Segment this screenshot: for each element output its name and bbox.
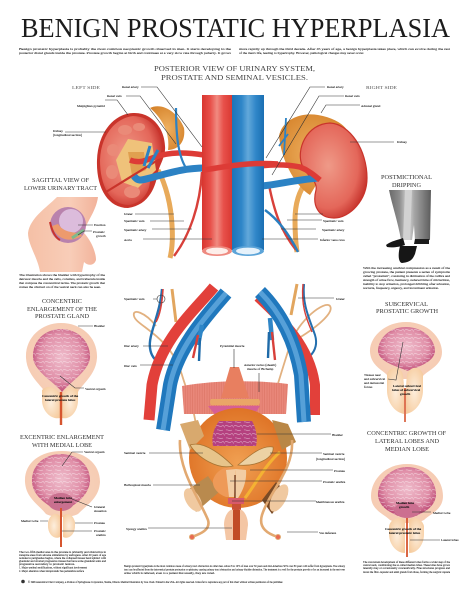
- heading: concentric growth: [367, 430, 447, 453]
- intro text: Benign prostatic hyperplasia is probably the most common neoplastic growth observed in men. It starts developing in the: [19, 47, 232, 51]
- left seminal vesicle: [190, 444, 233, 467]
- heading: excentric enlargement: WITH MEDIAL LOBE: [32, 442, 92, 449]
- left adrenal gland: [150, 106, 184, 150]
- text: postmictional caption: growing prostate, the patient presents a series of symptoms: [363, 270, 451, 275]
- labels: urinary system: Spermatic vein: [124, 219, 145, 223]
- labels: pelvic anatomy: (longitudinal section): [316, 457, 345, 461]
- panel: subcervical diagram: [370, 322, 442, 422]
- labels: pelvic anatomy: Anterior rectus (sheath): [244, 363, 276, 367]
- labels: pelvic anatomy: Membranous urethra: [316, 500, 345, 504]
- right renal artery crossing: [204, 163, 278, 170]
- labels: concentric growth: lateral prostatic lobes: [389, 531, 421, 535]
- labels: sagittal: growth: [96, 234, 106, 238]
- heading: subcervical growth: [376, 301, 439, 315]
- heading: sagittal view: LOWER URINARY TRACT: [24, 185, 97, 192]
- right lower vas deferens: [261, 440, 292, 540]
- labels: pelvic anatomy: Bladder: [332, 433, 344, 437]
- labels: concentric growth: Median lobe: [396, 501, 414, 505]
- labels: excentric enlargement: Ureteral: [94, 505, 105, 509]
- side label: left side: LEFT SIDE: [72, 85, 100, 90]
- labels: pelvic anatomy: Prostate: [334, 469, 345, 473]
- labels: urinary system: Spermatic artery: [322, 228, 345, 232]
- right kidney: [300, 123, 367, 218]
- text: sagittal caption: detrusor muscle and the cells, columns, and trabecula inside: [19, 277, 106, 282]
- labels: concentric enlargement: lateral prostate lobes: [45, 398, 76, 402]
- labels: pelvic anatomy: Prostatic urethra: [323, 480, 346, 484]
- labels: excentric enlargement: Medial Lobe: [21, 519, 39, 523]
- orange prostate capsule: [189, 408, 287, 508]
- labels: urinary system: Spermatic vein: [323, 219, 344, 223]
- text: central caption: tract can be affected from the intravesical prostate protrusion or sphincter, causing urinary tract obstruction and urinary bladder distention. The treatment is a well for the prostate growth or for an increased in the rest-over: [124, 568, 346, 572]
- text: postmictional caption: inability to stop urination, prolonged dribbling after urination,: [363, 282, 450, 287]
- labels: sagittal: Prostatic: [93, 230, 105, 234]
- heading: posterior view: PROSTATE AND SEMINAL VESICLES.: [161, 73, 308, 82]
- labels: urinary system: Inferior vena cava: [320, 238, 345, 242]
- cross section: [50, 207, 86, 243]
- text: concentric growth caption: [363, 560, 450, 575]
- membranous urethra: [228, 498, 244, 512]
- panel: posterior urinary system: [97, 95, 367, 258]
- labels: urinary system: Kidney: [53, 129, 63, 133]
- muscle band: [182, 381, 288, 414]
- left ureter: [158, 170, 172, 258]
- labels: sagittal: Erection: [94, 223, 106, 227]
- labels: urinary system: (longitudinal section): [53, 133, 82, 137]
- text: excentric caption: nodules in periglandes begins, where the collapsed tissues bend sphinct with: [19, 556, 106, 561]
- labels: excentric enlargement: Prostatic: [94, 529, 106, 533]
- labels: concentric enlargement: Concentric growth of the: [42, 394, 79, 398]
- icon: left shoe: [386, 238, 405, 247]
- labels: pelvic anatomy: Seminal vesicle: [124, 451, 146, 455]
- prostate right strip: [245, 452, 280, 498]
- bladder: [212, 421, 257, 446]
- heading: sagittal view: SAGITTAL VIEW OF: [32, 177, 90, 184]
- labels: urinary system: [53, 85, 407, 242]
- right spermatic vessels: [303, 284, 316, 356]
- heading: concentric enlargement: [27, 298, 97, 320]
- left iliac vein: [163, 293, 226, 430]
- intro text: of the man's life, leading to hypertrophy. However, pathological changes may never occur.: [239, 51, 364, 56]
- labels: subcervical: Lateral subcervical: [393, 384, 421, 388]
- title: BENIGN PROSTATIC HYPERPLASIA: [21, 13, 450, 43]
- labels: urinary system: Malpighian pyramid: [77, 104, 105, 108]
- heading: subcervical growth: SUBCERVICAL: [385, 301, 428, 308]
- text: postmictional caption: called "prostatism", consisting in diminution of the calibre and: [363, 274, 450, 279]
- labels: urinary system: Spermatic artery: [124, 228, 147, 232]
- labels: urinary system: Aorta: [124, 238, 132, 242]
- text: postmictional caption: strength of urine flow, hesitancy, reduced time of micturition,: [363, 278, 450, 283]
- left renal artery and vein: [130, 146, 206, 180]
- labels: pelvic anatomy: muscle of Bichamp: [247, 367, 274, 371]
- text: sagittal caption: comes the obstruct on of the vesical neck can also be seen.: [19, 285, 101, 289]
- labels: excentric enlargement: urethra: [96, 533, 106, 537]
- labels: subcervical: lobes of subcervical: [392, 388, 420, 392]
- prostate lobes: [213, 468, 236, 497]
- labels: excentric enlargement: [21, 450, 107, 537]
- right ureter: [295, 181, 307, 252]
- text: concentric growth caption: vesical neck, conditioning the so-called median lobes. These lobes have grown: [363, 563, 450, 568]
- left kidney: [97, 113, 165, 208]
- copyright: © 1996 Anatomical Chart Company, a division of Springhouse Corporation, Skokie, Illinois. Medical Illustration by Lisa Clark. Printed in the USA. All rights reserved. Unlawful to reproduce any part of this chart without written permission of the publisher.: [28, 579, 283, 585]
- text: concentric growth caption: laterally may or occasionally concentrically. Fine structures progress and: [363, 566, 450, 570]
- heading: concentric growth: LATERAL LOBES AND: [375, 438, 440, 445]
- text: concentric growth caption: The concurrent development of these different lobes forms a wider step of the: [363, 560, 450, 564]
- text: excentric caption: [19, 550, 106, 573]
- text: postmictional caption: With the increasing urethral compression as a result of the: [363, 266, 451, 270]
- heading: postmictional dripping: [381, 174, 432, 189]
- heading: postmictional dripping: DRIPPING: [392, 182, 422, 189]
- heading: concentric growth: CONCENTRIC GROWTH OF: [367, 430, 447, 437]
- labels: urinary system: Renal artery: [122, 85, 139, 89]
- icon: back shoe: [414, 239, 429, 244]
- labels: pelvic anatomy: Spermatic vein: [124, 297, 145, 301]
- text: sagittal caption: The illustration shows the bladder with hypertrophy of the: [19, 273, 106, 277]
- left lower vas deferens: [180, 440, 209, 540]
- intro text: posterior distal glands inside the prostate. Prostate growth begins at birth and continues at a very slow rate through puberty. It grows: [19, 51, 232, 55]
- left ureter: [172, 289, 176, 322]
- labels: subcervical: and detrusorial: [364, 381, 384, 385]
- labels: concentric enlargement: Bladder: [94, 324, 106, 328]
- labels: excentric enlargement: Prostate: [94, 521, 105, 525]
- penile bulb: [224, 510, 248, 540]
- labels: urinary system: Kidney: [397, 140, 407, 144]
- labels: urinary system: Ureter: [124, 212, 134, 216]
- labels: subcervical: Tissues near: [364, 373, 382, 377]
- right iliac wing: [272, 420, 296, 450]
- right seminal vesicle: [238, 447, 273, 465]
- left iliac artery: [149, 287, 214, 420]
- right iliac vein: [260, 292, 304, 422]
- text: postmictional caption: nocturia, frequency, urgency, and incontinent urination.: [363, 286, 439, 291]
- heading: posterior view: POSTERIOR VIEW OF URINARY SYSTEM,: [154, 64, 315, 73]
- text: postmictional caption: [363, 266, 451, 291]
- right iliac artery: [258, 297, 315, 415]
- labels: urinary system: Renal vein: [107, 94, 122, 98]
- labels: concentric growth: Medial Lobe: [433, 511, 451, 515]
- labels: concentric growth: growth: [399, 505, 409, 509]
- panel: concentric growth diagram: [371, 464, 443, 557]
- labels: pelvic anatomy: Bulbospinal muscle: [124, 483, 151, 487]
- heading: concentric enlargement: PROSTATE GLAND: [35, 313, 90, 320]
- panel: concentric enlargement diagram: [26, 323, 97, 425]
- heading: posterior view: [154, 64, 315, 82]
- text: excentric caption: 2. Major alteration when intraprostatic has periurethra surface: [19, 569, 84, 573]
- labels: concentric growth: Concentric growth of the: [385, 527, 422, 531]
- icon: right shoe: [399, 246, 417, 263]
- panel: trousers and shoes illustration: [386, 190, 431, 263]
- text: central caption: [124, 564, 346, 576]
- labels: pelvic anatomy: Seminal vesicle: [323, 452, 345, 456]
- text: central caption: urine which is relieved, even to a patient that usually, they are cured.: [124, 571, 215, 576]
- labels: urinary system: Renal vein: [345, 94, 360, 98]
- text: sagittal caption: [19, 273, 106, 289]
- labels: pelvic anatomy: [124, 295, 346, 535]
- left internal iliac branch: [193, 325, 202, 361]
- intro text: [19, 47, 450, 56]
- labels: excentric enlargement: Vesical orgasm: [84, 450, 105, 454]
- heading: subcervical growth: PROSTATIC GROWTH: [376, 308, 439, 315]
- right vas deferens loop: [270, 305, 331, 410]
- left corpus cavernosum: [180, 476, 219, 515]
- heading: concentric enlargement: CONCENTRIC: [42, 298, 82, 305]
- heading: concentric enlargement: ENLARGEMENT OF THE: [27, 306, 97, 313]
- heading: excentric enlargement: EXCENTRIC ENLARGEMENT: [20, 434, 104, 441]
- labels: excentric enlargement: enlargement: [54, 500, 73, 504]
- text: excentric caption: glandular and stromal progressive tissues that have some glandular units and: [19, 559, 106, 563]
- side label: right side: RIGHT SIDE: [366, 85, 397, 90]
- labels: pelvic anatomy: Iliac vein: [124, 364, 137, 368]
- labels: subcervical: and subcervical: [364, 377, 385, 381]
- labels: subcervical: growth: [400, 392, 410, 396]
- right corpus cavernosum: [262, 481, 292, 515]
- labels: pelvic anatomy: Iliac artery: [124, 344, 139, 348]
- text: excentric caption: The two-fifth medial area in the prostate is primarily and obstructive in: [19, 550, 106, 554]
- labels: subcervical: [364, 342, 421, 396]
- labels: concentric growth: [385, 501, 459, 542]
- right ureter: [291, 284, 297, 315]
- labels: urinary system: Renal artery: [327, 85, 344, 89]
- panel: sagittal view: [28, 197, 98, 272]
- panel: excentric enlargement diagram: [25, 451, 100, 547]
- heading: postmictional dripping: POSTMICTIONAL: [381, 174, 432, 181]
- panel: pelvic anatomy: [134, 284, 331, 540]
- heading: sagittal view: [24, 177, 97, 192]
- labels: sagittal: [78, 223, 106, 238]
- left spermatic vessels: [150, 289, 163, 361]
- heading: concentric growth: MEDIAN LOBE: [385, 446, 429, 453]
- text: excentric caption: transpire areas from adverse stimulation by androgens. After 40 years of age: [19, 553, 106, 557]
- trouser legs: [389, 190, 431, 241]
- text: excentric caption: 1. Major urethral modifications, without significant involvement: [19, 566, 87, 570]
- intro text: more rapidly up through the third decade. After 45 years of age, a benign hyperplasia takes place, which can evolve during the rest: [239, 47, 450, 52]
- pubic plate: [210, 399, 260, 405]
- aorta: [202, 95, 232, 256]
- right renal artery and vein: [236, 118, 320, 186]
- text: sagittal caption: that compose the concentrical lacina. The prostatic growth that: [19, 281, 105, 285]
- labels: urinary system: Adrenal gland: [361, 104, 381, 108]
- labels: concentric enlargement: Vesical orgasm: [85, 387, 106, 391]
- copyright: [21, 579, 283, 585]
- labels: pelvic anatomy: Ureter: [336, 297, 346, 301]
- pyramidal muscle: [221, 367, 249, 398]
- right adrenal gland: [279, 114, 348, 195]
- pelvic cartilage: [208, 406, 260, 421]
- body silhouette: [28, 197, 98, 272]
- spermatic vessels: [174, 172, 298, 256]
- labels: pelvic anatomy: Vas deferens: [319, 531, 337, 535]
- labels: pelvic anatomy: Pyramidal muscle: [220, 344, 245, 348]
- left iliac wing: [180, 420, 204, 450]
- right internal iliac branch: [268, 318, 275, 360]
- left vas deferens loop: [134, 312, 196, 425]
- labels: excentric enlargement: Median lobe: [54, 496, 72, 500]
- trouser crease: [403, 190, 412, 240]
- text: central caption: Benign prostatic hyperplasia is the most common cause of urinary tract obstruction in older men. About 8 to 10% of men over 50 years and mid-American 50% over 80 years will suffer from hyperplasia. The urinary: [124, 564, 345, 568]
- text: excentric caption: progressive secondary to prostatic lesions.: [19, 562, 75, 566]
- inferior vena cava: [232, 95, 264, 256]
- left suprarenal vessel: [176, 108, 186, 168]
- labels: pelvic anatomy: Spongy urethra: [126, 527, 147, 531]
- labels: concentric enlargement: [42, 324, 106, 402]
- labels: excentric enlargement: sinuation: [94, 509, 107, 513]
- labels: subcervical: forces: [364, 385, 373, 389]
- heading: excentric enlargement: [20, 434, 104, 449]
- labels: concentric growth: Lateral lobes: [441, 538, 459, 542]
